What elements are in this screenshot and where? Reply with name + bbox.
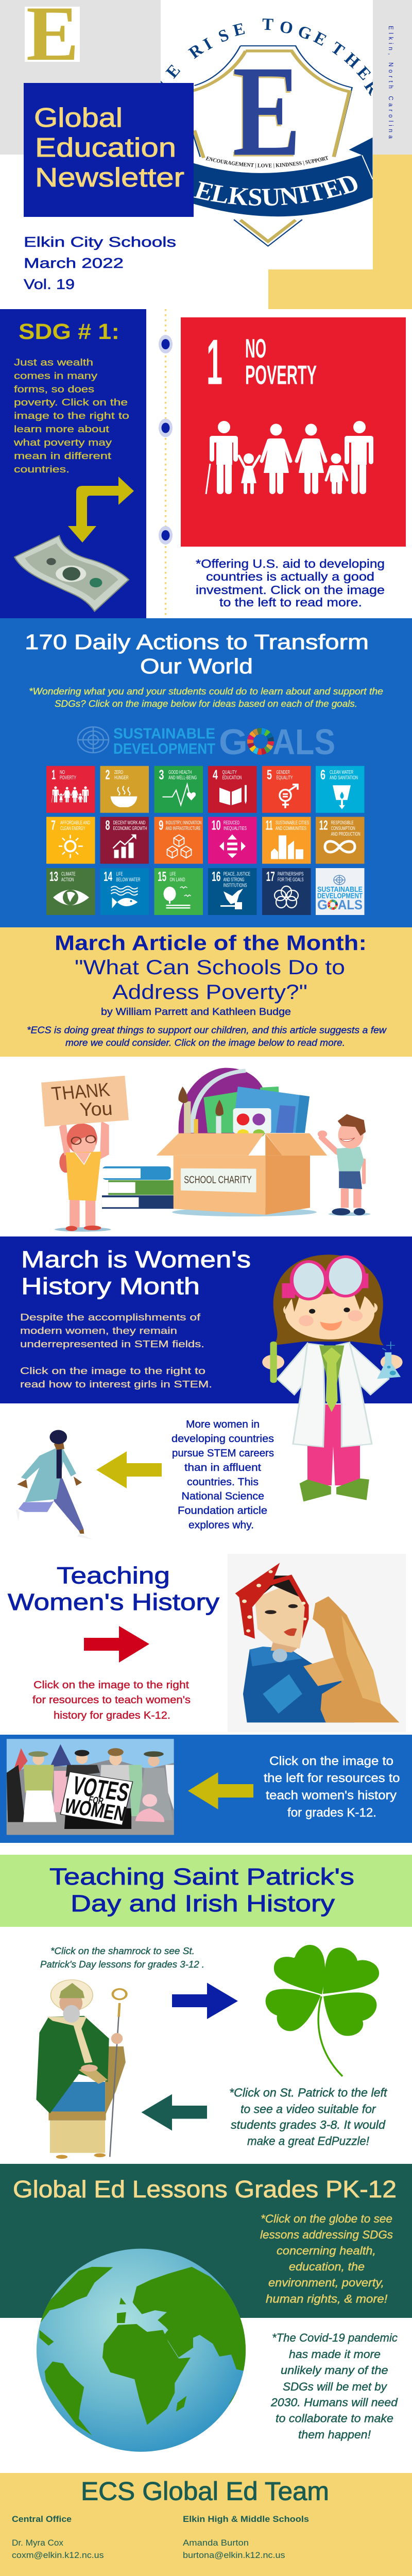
text block: STEM careers note: Foundation article	[178, 1505, 267, 1517]
tile 9: 9	[159, 817, 163, 833]
tile 3: AND WELL-BEING	[168, 775, 197, 781]
test tube	[270, 1342, 277, 1383]
text block: STEM careers note	[171, 1419, 274, 1531]
crest circular motto: W	[149, 77, 174, 100]
text block: STEM careers note: explores why.	[188, 1520, 254, 1531]
team column: right	[183, 2515, 309, 2576]
text block: Covid note	[270, 2331, 398, 2441]
arrow: yellow left	[96, 1451, 162, 1488]
text block: Covid note: 2030. Humans will need	[270, 2396, 398, 2409]
heading: Teaching Saint Patrick's	[49, 1863, 354, 1890]
text block: video note: make a great EdPuzzle!	[247, 2134, 370, 2147]
SDG logo	[78, 722, 335, 762]
section: SDG 1	[0, 309, 406, 618]
yellow section background	[0, 927, 412, 1057]
girl with thank-you sign: THANK	[50, 1079, 111, 1105]
tile 4	[208, 766, 256, 813]
tile 5: 5	[267, 767, 272, 783]
article title	[75, 956, 345, 1004]
tile 12: AND PRODUCTION	[331, 831, 360, 837]
arms and hands	[262, 1354, 284, 1369]
text block: video note: to see a video suitable for	[241, 2102, 376, 2115]
arrow: yellow left	[188, 1772, 253, 1809]
tile 14: 14	[104, 869, 112, 884]
text block: STEM intro: underrepresented in STEM fields.	[20, 1338, 204, 1349]
tile 11: AND COMMUNITIES	[276, 825, 306, 832]
grey backdrop right	[373, 0, 412, 155]
text block: shamrock note	[40, 1945, 204, 1970]
tile 18 SDG logo: ALS	[338, 897, 363, 912]
section: Women's History Month	[0, 1236, 412, 1539]
heading	[21, 1246, 251, 1299]
text block: resources left	[264, 1754, 400, 1820]
illustration: walking scientist	[16, 1430, 93, 1539]
crest banner text: ELKSUNITED	[194, 176, 357, 206]
text block: globe note: environment, poverty,	[268, 2276, 384, 2289]
text block: poverty intro: Just as wealth	[14, 357, 93, 368]
text block: poverty intro: comes in many	[14, 370, 98, 381]
text block: aid note: investment. Click on the image	[196, 583, 385, 597]
crest circular motto: R	[185, 40, 207, 62]
heading: Women's History	[8, 1589, 220, 1615]
tile 3: 3	[159, 767, 164, 783]
tile 10: 10	[212, 817, 221, 833]
tile 16: INSTITUTIONS	[224, 882, 247, 888]
icon: dollar bill	[14, 536, 129, 611]
image: Rosie the Riveter	[228, 1554, 406, 1732]
section: ECS Global Ed Team	[0, 2473, 412, 2576]
arrow: bent two-way	[68, 477, 134, 543]
logo wordmark: SUSTAINABLE	[113, 725, 215, 742]
heading: March is Women's	[21, 1246, 251, 1273]
tile 14: BELOW WATER	[116, 876, 141, 883]
panel: SDG 1 blue column	[0, 309, 146, 618]
tile 15: 15	[158, 869, 166, 884]
text block: poverty intro: forms, so does	[14, 383, 94, 395]
tile 17: PARTNERSHIPS	[278, 871, 304, 877]
tile 6: CLEAN WATER	[330, 769, 353, 775]
yellow backdrop	[268, 155, 412, 309]
text block: globe note	[260, 2212, 393, 2305]
backpack and supplies	[178, 1068, 310, 1137]
crest circular motto: E	[353, 63, 374, 84]
crest shield	[194, 45, 373, 247]
tile 13: CLIMATE	[61, 871, 75, 877]
heading	[8, 1563, 220, 1615]
text block: Covid note: them happen!	[298, 2428, 371, 2441]
tile 15: ON LAND	[170, 876, 185, 883]
crest letter E	[233, 69, 296, 157]
article note: more we could consider. Click on the image below to read more.	[65, 1038, 345, 1048]
SDG tile grid	[46, 766, 365, 915]
text block: video note	[229, 2086, 388, 2147]
title box: Global	[34, 103, 123, 133]
tile 12: 12	[319, 817, 328, 833]
image: shamrock	[266, 1945, 379, 2076]
subheading	[29, 686, 383, 709]
heading: March Article of the Month:	[55, 931, 367, 955]
tile 15	[154, 868, 203, 915]
heading: 170 Daily Actions to Transform	[25, 630, 369, 654]
tile 9	[154, 817, 203, 863]
text block: poverty intro: image to the right to	[14, 410, 129, 421]
green header band	[0, 1855, 412, 1927]
blue band	[0, 1735, 412, 1843]
team column: left	[12, 2515, 131, 2576]
text block: Covid note: SDGs will be met by	[283, 2380, 388, 2393]
tile 7: CLEAN ENERGY	[60, 825, 85, 832]
text block: poverty intro: countries.	[14, 464, 70, 474]
tile 2: 2	[105, 767, 110, 783]
tile 10: REDUCED	[224, 820, 239, 826]
crest circular motto: S	[216, 26, 232, 46]
tile 4: 4	[213, 767, 218, 783]
crest circular motto: E	[231, 20, 247, 40]
logo wordmark: DEVELOPMENT	[113, 741, 215, 757]
title box: Education	[35, 133, 176, 163]
text block: video note: *Click on St. Patrick to the left	[229, 2086, 388, 2099]
tile 7: 7	[51, 817, 56, 833]
logo GOALS: G	[219, 722, 248, 762]
crest circular motto: T	[262, 15, 274, 34]
tile 16: AND STRONG	[224, 876, 245, 883]
text block: STEM careers note: More women in	[186, 1419, 260, 1430]
text block: poverty intro	[13, 357, 129, 474]
subheading: *Wondering what you and your students could do to learn about and support the	[29, 686, 383, 697]
tile 3: GOOD HEALTH	[168, 769, 192, 775]
tile 1: 1	[52, 767, 56, 783]
text block: resources left: the left for resources to	[264, 1771, 400, 1785]
grey backdrop left	[0, 0, 161, 155]
heading: ECS Global Ed Team	[81, 2477, 329, 2506]
issue details	[24, 234, 176, 292]
issue details: March 2022	[24, 255, 124, 271]
article title: Address Poverty?"	[112, 981, 307, 1004]
text block: shamrock note: Patrick's Day lessons for grades 3-12 .	[40, 1959, 204, 1970]
section: Global Ed Lessons	[0, 2164, 412, 2452]
team column: left: coxm@elkin.k12.nc.us	[12, 2551, 104, 2560]
text block: resources right: for resources to teach women's	[32, 1694, 191, 1706]
image: suffragists	[7, 1739, 174, 1835]
text block: poverty intro: what poverty may	[13, 437, 112, 448]
title box: Newsletter	[35, 163, 184, 193]
crest circular motto: E	[311, 28, 330, 50]
team column: left: Central Office	[12, 2515, 72, 2524]
image: globe	[34, 2249, 252, 2452]
teal section background	[0, 2164, 412, 2318]
text block: STEM careers note: countries. This	[187, 1477, 259, 1488]
text block: poverty intro: poverty. Click on the	[14, 397, 128, 408]
text block: aid note: *Offering U.S. aid to developing	[196, 557, 385, 570]
section: Saint Patrick's Day	[0, 1855, 412, 2159]
tile 11	[262, 817, 311, 863]
tile 6: AND SANITATION	[330, 775, 358, 781]
panel: school crest logo	[161, 19, 373, 247]
heading	[25, 630, 369, 678]
heading: Day and Irish History	[71, 1890, 335, 1917]
logo GOALS	[219, 722, 335, 762]
article title: "What Can Schools Do to	[75, 956, 345, 979]
votes sign	[60, 1771, 133, 1826]
section: Votes for Women	[0, 1735, 412, 1843]
tile 2: HUNGER	[114, 775, 129, 781]
text block: aid note: to the left to read more.	[219, 596, 362, 609]
tile 13: ACTION	[61, 876, 74, 883]
tile 13	[46, 868, 95, 915]
text block: STEM careers note: developing countries	[171, 1433, 274, 1445]
icon: SDG colour wheel	[250, 731, 271, 752]
image: Saint Patrick	[36, 1980, 126, 2159]
text block: globe note: concerning health,	[277, 2244, 376, 2257]
crest circular motto: E	[163, 61, 184, 82]
tile 6: 6	[320, 767, 325, 783]
text block: Covid note: unlikely many of the	[281, 2364, 388, 2377]
tile 12: CONSUMPTION	[331, 825, 355, 832]
tile 7: AFFORDABLE AND	[60, 820, 90, 826]
crest letter E: E	[231, 41, 300, 185]
smiling boy	[318, 1114, 370, 1216]
logo wordmark	[113, 725, 215, 757]
tile 13: 13	[49, 869, 58, 884]
arrow: green left	[141, 2094, 207, 2131]
logo GOALS: ALS	[272, 722, 335, 762]
tile 8: ECONOMIC GROWTH	[113, 825, 147, 832]
text block: STEM intro: Click on the image to the right to	[20, 1365, 205, 1376]
pants	[307, 1404, 360, 1485]
tile 5: EQUALITY	[276, 775, 293, 781]
team column: right: Amanda Burton	[183, 2538, 249, 2548]
tile 11: SUSTAINABLE CITIES	[276, 820, 309, 826]
icon: family	[206, 421, 373, 494]
team column: right: burtona@elkin.k12.nc.us	[183, 2551, 285, 2560]
timeline dotted line	[165, 309, 166, 618]
votes sign: WOMEN	[62, 1794, 128, 1826]
tile 1: NO	[60, 769, 65, 775]
crest values arc: ENCOURAGEMENT | LOVE | KINDNESS | SUPPORT	[205, 156, 329, 168]
girl with thank-you sign	[41, 1076, 129, 1232]
heading: Teaching	[57, 1563, 170, 1589]
tile 1: POVERTY	[60, 775, 76, 781]
tile 5: GENDER	[276, 769, 290, 775]
text block: Covid note: has made it more	[289, 2348, 381, 2361]
text block: aid note	[196, 557, 385, 609]
tile 17	[262, 868, 311, 915]
tile 16	[208, 868, 256, 915]
tile 7	[46, 817, 95, 863]
tile 10: INEQUALITIES	[224, 825, 247, 832]
tile 3	[154, 766, 203, 813]
subheading: SDGs? Click on the image below for ideas based on each of the goals.	[55, 698, 357, 709]
tile 16: PEACE, JUSTICE	[224, 871, 250, 877]
goal title: POVERTY	[245, 361, 317, 391]
book stack	[102, 1166, 174, 1209]
tile 2: ZERO	[114, 769, 123, 775]
text block: globe note: education, the	[289, 2260, 365, 2273]
charity box: SCHOOL CHARITY	[184, 1174, 252, 1185]
tile 4: EDUCATION	[222, 775, 242, 781]
tile 18 SDG logo: G	[317, 897, 328, 912]
heading: History Month	[21, 1273, 200, 1299]
tile 8	[100, 817, 149, 863]
shoes	[300, 1480, 331, 1501]
tile 4: QUALITY	[222, 769, 237, 775]
section: 170 daily actions	[0, 618, 412, 927]
byline: by William Parrett and Kathleen Budge	[101, 1006, 291, 1018]
section: masthead	[0, 0, 412, 309]
crest circular motto: G	[295, 22, 314, 44]
title box	[24, 83, 194, 217]
tile 9: AND INFRASTRUCTURE	[166, 825, 201, 832]
panel: No Poverty goal card	[181, 317, 406, 547]
text block: globe note: *Click on the globe to see	[261, 2212, 392, 2225]
crest circular motto: I	[200, 35, 215, 54]
tile 18 SDG logo: SUSTAINABLE	[317, 885, 363, 894]
tile 15: LIFE	[170, 871, 176, 877]
team column: left: Dr. Myra Cox	[12, 2538, 64, 2548]
text block: resources left: for grades K-12.	[287, 1806, 376, 1820]
icon: UN emblem	[78, 727, 109, 753]
tile 18 SDG logo	[316, 868, 365, 915]
text block: resources left: teach women's history	[266, 1789, 397, 1803]
votes sign: VOTES	[70, 1771, 132, 1807]
heading: SDG # 1: SDG # 1:	[19, 319, 119, 344]
tile 16: 16	[212, 869, 220, 884]
issue details: Vol. 19	[24, 276, 75, 292]
crest circular motto: H	[341, 49, 363, 72]
tile 18 SDG logo: DEVELOPMENT	[317, 891, 363, 901]
hair	[273, 1255, 384, 1345]
text block: STEM intro: read how to interest girls in STEM.	[20, 1379, 212, 1389]
text block: STEM careers note: National Science	[181, 1491, 264, 1502]
crest letter E: E	[233, 39, 301, 183]
text block: globe note: human rights, & more!	[266, 2293, 387, 2305]
crest circular motto: T	[328, 39, 348, 60]
tile 5	[262, 766, 311, 813]
heading	[49, 1863, 354, 1917]
goal title: NO	[245, 334, 266, 364]
tile 8: DECENT WORK AND	[113, 820, 146, 826]
tile 14	[100, 868, 149, 915]
tile 2	[100, 766, 149, 813]
goal title	[245, 334, 317, 391]
article note: *ECS is doing great things to support our children, and this article suggests a few	[27, 1025, 387, 1036]
crest circular motto: R	[360, 78, 383, 98]
face	[285, 1286, 374, 1340]
text block: resources left: Click on the image to	[269, 1754, 393, 1768]
illustration: girl scientist	[262, 1255, 403, 1501]
text block: globe note: lessons addressing SDGs	[260, 2228, 393, 2241]
text block: Covid note: *The Covid-19 pandemic	[272, 2331, 398, 2344]
blue section background	[0, 618, 412, 927]
girl with thank-you sign: You	[79, 1098, 113, 1121]
text block: STEM careers note: pursue STEM careers	[172, 1448, 274, 1459]
yellow section background	[0, 2473, 412, 2576]
tile 11: 11	[266, 817, 273, 833]
tile 10	[208, 817, 256, 863]
tile 12	[316, 817, 365, 863]
text block: STEM intro: Despite the accomplishments of	[20, 1312, 201, 1323]
text block: shamrock note: *Click on the shamrock to see St.	[50, 1945, 195, 1956]
flask	[377, 1352, 401, 1379]
tile 8: 8	[105, 817, 110, 833]
team column: right: Elkin High & Middle Schools	[183, 2515, 309, 2524]
tile 17: FOR THE GOALS	[278, 876, 304, 883]
text block: Covid note: to collaborate to make	[276, 2412, 393, 2425]
tile 6	[316, 766, 365, 813]
tile 17: 17	[266, 869, 275, 884]
heading: Global Ed Lessons Grades PK-12	[13, 2176, 397, 2202]
arrow: blue right	[172, 1982, 238, 2019]
goggles	[282, 1283, 295, 1298]
heading: Our World	[140, 654, 253, 678]
tile 12: RESPONSIBLE	[331, 820, 354, 826]
votes sign: FOR	[88, 1794, 105, 1807]
lab coat	[293, 1344, 324, 1447]
crest banner	[349, 138, 372, 179]
timeline markers	[159, 335, 173, 545]
section: Teaching Women's History	[8, 1554, 406, 1732]
text block: video note: students grades 3-8. It would	[231, 2118, 386, 2131]
illustration: school charity	[41, 1068, 370, 1232]
blue section background	[0, 1236, 412, 1403]
text block: poverty intro: mean in different	[14, 450, 111, 461]
vertical location text: Elkin, North Carolina	[387, 26, 393, 139]
issue details: Elkin City Schools	[24, 234, 176, 250]
charity box	[157, 1133, 327, 1216]
panel: No Poverty goal card: 1	[207, 327, 222, 398]
tile 14: LIFE	[116, 871, 123, 877]
tile 9: INDUSTRY, INNOVATION	[166, 820, 202, 826]
text block: aid note: countries is actually a good	[206, 570, 374, 583]
text block: STEM careers note: than in affluent	[184, 1462, 261, 1473]
text block: STEM intro: modern women, they remain	[20, 1325, 177, 1336]
text block: resources right: history for grades K-12.	[54, 1710, 170, 1721]
article note	[27, 1025, 387, 1048]
arrow: red right	[84, 1626, 149, 1663]
text block: poverty intro: learn more about	[14, 423, 109, 434]
crest circular motto: O	[278, 18, 295, 38]
text block: resources right	[32, 1680, 191, 1721]
section: article of the month	[0, 927, 412, 1232]
crest circular motto	[161, 19, 373, 96]
text block: STEM intro	[20, 1312, 212, 1389]
text block: resources right: Click on the image to the right	[33, 1680, 189, 1691]
tile 1	[46, 766, 95, 813]
